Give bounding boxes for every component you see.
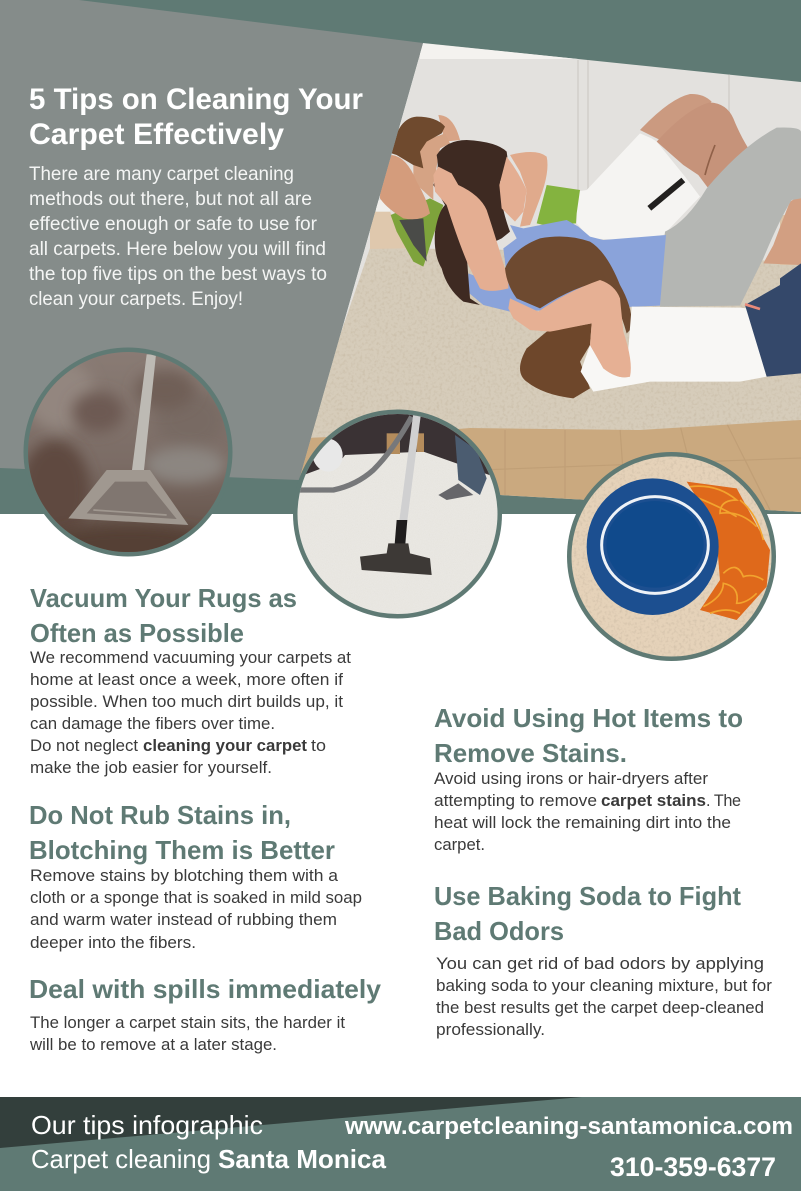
intro title [29, 83, 363, 151]
footer phone: 310-359-6377 [610, 1152, 776, 1182]
tip: deal with spills [29, 974, 382, 1054]
man's head and arms [438, 115, 460, 142]
navy shorts [745, 263, 801, 377]
circle photo: spilled plate on carpet [567, 452, 777, 662]
tip body: can damage the fibers over time. [30, 715, 275, 733]
footer tagline: Our tips infographic [31, 1110, 263, 1140]
tip body [30, 649, 352, 777]
tip body: heat will lock the remaining dirt into the [434, 814, 731, 832]
tip body: and warm water instead of rubbing them [30, 911, 337, 929]
tip heading: Remove Stains. [434, 738, 627, 768]
footer tagline: Santa Monica [218, 1144, 387, 1174]
woman's far arm [510, 152, 547, 227]
circle photo: steam cleaning wand [20, 345, 240, 565]
man's legs [640, 94, 712, 142]
grey leggings [660, 127, 801, 307]
tip heading: Avoid Using Hot Items to [434, 703, 743, 733]
tip heading: Blotching Them is Better [29, 835, 335, 865]
tip body: carpet stains [601, 792, 706, 810]
footer tagline [31, 1110, 387, 1174]
footer tagline: Carpet cleaning [31, 1144, 211, 1174]
teal header band and lower strip [0, 0, 801, 514]
shag rug [305, 248, 801, 438]
tip: avoid hot items [434, 703, 743, 854]
tip body: The longer a carpet stain sits, the harder it [30, 1014, 346, 1032]
tip body: cleaning your carpet [143, 737, 308, 755]
intro paragraph: all carpets. Here below you will find [29, 239, 326, 260]
tip body: Avoid using irons or hair-dryers after [434, 770, 709, 788]
man's shirt [537, 185, 580, 225]
tip body: deeper into the fibers. [30, 934, 196, 952]
white shorts [577, 133, 700, 240]
tip heading [29, 800, 335, 865]
girl's arm [508, 280, 631, 377]
tip body: carpet. [434, 836, 485, 854]
circle photo: vacuum on white rug [290, 400, 503, 620]
tip body: You can get rid of bad odors by applying [436, 955, 764, 973]
girl's shirt [581, 307, 767, 392]
tip body: to [311, 737, 326, 755]
footer website: www.carpetcleaning-santamonica.com [344, 1113, 793, 1140]
grey intro panel [0, 0, 423, 480]
tip heading: Use Baking Soda to Fight [434, 881, 741, 911]
intro paragraph: There are many carpet cleaning [29, 164, 294, 185]
tip heading: Do Not Rub Stains in, [29, 800, 291, 830]
tip body: will be to remove at a later stage. [29, 1036, 277, 1054]
tip body: possible. When too much dirt builds up, it [30, 693, 344, 711]
tip heading: Bad Odors [434, 916, 564, 946]
tip body: make the job easier for yourself. [30, 759, 272, 777]
tip heading [434, 703, 743, 768]
tip body: home at least once a week, more often if [30, 671, 344, 689]
tip body: . The [706, 792, 741, 810]
intro paragraph [29, 164, 327, 310]
tip body: the best results get the carpet deep-cleaned [436, 999, 764, 1017]
tip: vacuum your rugs [30, 583, 352, 777]
tip heading [434, 881, 741, 946]
intro paragraph: methods out there, but not all are [29, 189, 312, 210]
tip body [30, 867, 362, 952]
tip body [436, 955, 773, 1039]
tip body: We recommend vacuuming your carpets at [30, 649, 352, 667]
people drawn in zoomed coordinates [370, 94, 801, 398]
tip: baking soda [434, 881, 773, 1039]
tip body: cloth or a sponge that is soaked in mild soap [30, 889, 362, 907]
tip body: professionally. [436, 1021, 545, 1039]
tip body [434, 770, 741, 854]
blue shirt [467, 220, 666, 312]
intro title: Carpet Effectively [29, 118, 284, 151]
intro title: 5 Tips on Cleaning Your [29, 83, 363, 116]
tip body: Remove stains by blotching them with a [30, 867, 338, 885]
tip heading: Vacuum Your Rugs as [30, 583, 297, 613]
intro paragraph: the top five tips on the best ways to [29, 264, 327, 285]
tip heading [30, 583, 297, 648]
hero photo: family exercising on carpet [290, 40, 801, 520]
intro paragraph: effective enough or safe to use for [29, 214, 318, 235]
tip body [29, 1014, 346, 1054]
tip body: Do not neglect [30, 737, 139, 755]
footer band [0, 1097, 801, 1191]
girl's hair [505, 236, 632, 333]
tip heading: Often as Possible [30, 618, 244, 648]
tip heading: Deal with spills immediately [29, 974, 382, 1004]
right foot [763, 195, 801, 265]
intro paragraph: clean your carpets. Enjoy! [29, 289, 243, 310]
tip: do not rub stains [29, 800, 362, 952]
woman's hair and face [433, 140, 510, 305]
tip body: baking soda to your cleaning mixture, but for [436, 977, 773, 995]
tip body: attempting to remove [434, 792, 597, 810]
